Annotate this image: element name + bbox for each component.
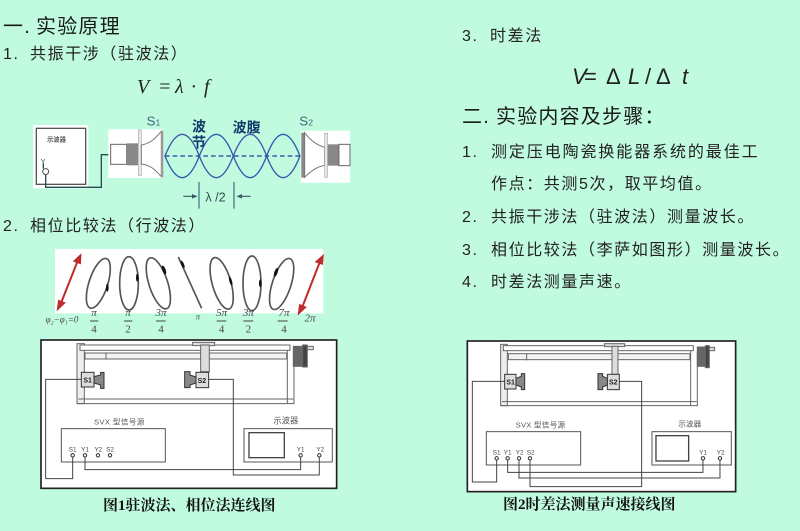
axis labels: phase differences: 3π [154, 307, 167, 319]
label: S2: S2 [299, 113, 313, 128]
text: method 2 title: 相位比较法（行波法） [30, 217, 206, 235]
diagram: figure 2 wiring [467, 341, 736, 492]
panel: oscilloscope: Y2 [717, 450, 725, 457]
label: wave node: 波 [192, 118, 206, 134]
component: S1: S1 [506, 379, 515, 386]
text: method 3 title: 时差法 [490, 27, 543, 45]
step 4: 时差法测量声速。 [491, 273, 632, 291]
axis labels: phase differences: π [125, 307, 131, 319]
component: S2 [598, 374, 619, 390]
formula: V = delta L / delta t: V [572, 64, 589, 89]
component: S1 [505, 374, 525, 390]
heading: section two: 二. [462, 106, 490, 128]
formula: V = delta L / delta t: Δ [606, 64, 621, 89]
formula: V = delta L / delta t: t [682, 64, 689, 89]
panel: oscilloscope [244, 416, 332, 462]
annotation: half wavelength [183, 182, 251, 209]
panel: SVX signal source: S2 [106, 447, 114, 454]
step 3: 相位比较法（李萨如图形）测量波长。 [491, 241, 790, 259]
panel: SVX signal source: Y1 [81, 447, 89, 454]
step 1 continued: 作点：共测5次，取平均值。 [491, 175, 713, 193]
icon: oscilloscope [33, 125, 111, 188]
apparatus: rail [77, 342, 313, 404]
panel: SVX signal source: Y2 [516, 450, 524, 457]
formula: V = lambda f: · [191, 76, 196, 98]
step 4: 4. [462, 274, 479, 291]
step 3: 3. [462, 242, 479, 259]
diagram: figure 1 wiring [41, 340, 337, 488]
text: method 3 title: 3. [462, 28, 479, 45]
arrow: left red line [58, 256, 80, 309]
panel: SVX signal source: Y2 [94, 447, 103, 454]
caption: figure 1: 图1驻波法、相位法连线图 [103, 496, 276, 514]
axis labels: phase differences: 5π [216, 307, 228, 319]
label: S1: S1 [147, 113, 161, 128]
panel: frame [41, 340, 337, 488]
chart: Lissajous figures [46, 249, 323, 335]
arrow: right red line [299, 256, 323, 313]
component: S2: S2 [198, 378, 206, 385]
panel: SVX signal source [486, 419, 581, 465]
axis labels: phase differences: 4 [158, 323, 164, 335]
panel: oscilloscope: 示波器 [678, 418, 702, 428]
panel: frame [467, 341, 736, 492]
caption: figure 2: 图2时差法测量声速接线图 [503, 495, 676, 513]
text: method 2 title: 2. [3, 218, 20, 235]
panel: SVX signal source: Y1 [504, 450, 512, 457]
component: S2 [185, 372, 209, 388]
formula: V = delta L / delta t: / [645, 64, 652, 89]
label: wave node: 节 [192, 134, 206, 150]
annotation: half wavelength: λ /2 [205, 190, 226, 204]
panel: SVX signal source: SVX 型信号源 [94, 416, 145, 426]
formula: V = delta L / delta t: L [628, 64, 640, 89]
component: S1: S1 [83, 378, 92, 385]
panel: oscilloscope: Y1 [699, 450, 707, 457]
step 2: 2. [462, 209, 479, 226]
axis labels: phase differences: φ₂−φ₁=0 [46, 314, 79, 324]
wiring [472, 381, 720, 487]
text: method 1 title: 共振干涉（驻波法） [30, 45, 188, 63]
panel: SVX signal source: SVX 型信号源 [516, 419, 565, 429]
axis labels: phase differences: 2π [304, 313, 316, 325]
step 1: 测定压电陶瓷换能器系统的最佳工 [491, 143, 760, 161]
panel: white background [55, 249, 323, 313]
list: steps [462, 143, 790, 291]
figures: ellipses [81, 255, 299, 312]
heading: section one: 实验原理 [36, 15, 121, 38]
component: S2: S2 [609, 379, 618, 386]
diagram: standing wave setup [33, 113, 350, 209]
text: method 1 title: 1. [3, 46, 20, 63]
formula: V = lambda f: V [137, 76, 149, 98]
axis labels: phase differences: 4 [281, 323, 287, 335]
component: S1 [81, 372, 104, 388]
axis labels: phase differences: 4 [219, 323, 225, 335]
wiring [46, 379, 319, 479]
axis labels: phase differences: 2 [246, 323, 251, 335]
panel: oscilloscope: Y1 [297, 447, 305, 454]
panel: SVX signal source: S2 [527, 450, 535, 457]
heading: section two: 实验内容及步骤： [496, 105, 666, 128]
axis labels: phase differences [46, 307, 316, 335]
axis labels: phase differences: π [91, 307, 97, 319]
icon: transducer S1 [108, 129, 163, 178]
label: antinode: 波腹 [233, 120, 261, 136]
formula: V = delta L / delta t: Δ [656, 64, 671, 89]
axis labels: phase differences: 4 [91, 323, 97, 335]
axis labels: phase differences: 2 [125, 323, 131, 335]
icon: oscilloscope: 示波器 [47, 135, 67, 144]
heading: section one: 一. [3, 16, 31, 38]
formula: V = lambda f: λ [174, 76, 184, 98]
panel: oscilloscope [652, 418, 731, 465]
panel: oscilloscope: Y2 [316, 447, 325, 454]
axis labels: phase differences: 3π [242, 307, 254, 319]
apparatus: rail [501, 344, 715, 406]
arrowheads on figures [106, 260, 279, 292]
icon: oscilloscope: Y [41, 157, 46, 166]
formula: V = lambda f: = [158, 76, 172, 98]
chart: standing wave curves [165, 134, 300, 178]
step 2: 共振干涉法（驻波法）测量波长。 [491, 208, 755, 226]
icon: transducer S2 [301, 131, 350, 183]
axis labels: phase differences: 7π [278, 307, 290, 319]
panel: SVX signal source: S1 [69, 447, 77, 454]
step 1: 1. [462, 144, 479, 161]
panel: SVX signal source [61, 416, 165, 462]
axis labels: phase differences: π [196, 312, 201, 322]
panel: SVX signal source: S1 [493, 450, 501, 457]
label: wave node [192, 118, 206, 150]
formula: V = delta L / delta t: = [584, 64, 597, 89]
panel: oscilloscope: 示波器 [273, 416, 299, 426]
formula: V = lambda f: f [204, 76, 212, 98]
